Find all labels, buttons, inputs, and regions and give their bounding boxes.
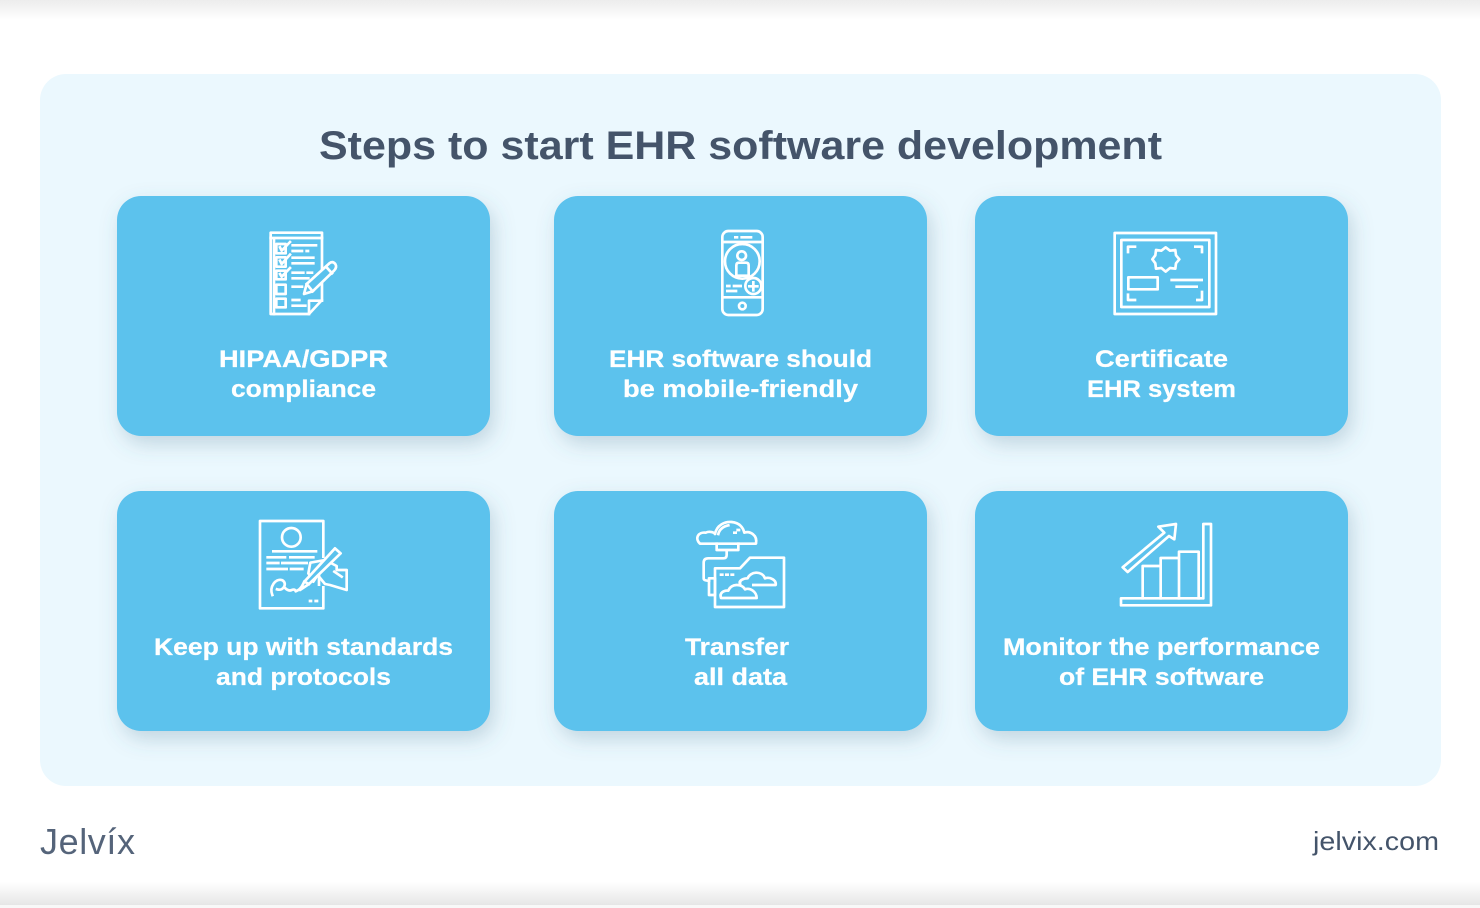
card: certificate: [975, 196, 1348, 436]
label: [154, 634, 453, 691]
website: jelvix.com: [1312, 826, 1439, 856]
label: Monitor the performance: [1003, 634, 1320, 661]
card: standards and protocols: [117, 491, 490, 731]
card: monitor performance: [975, 491, 1348, 731]
label: HIPAA/GDPR: [219, 346, 388, 373]
icon: signed document: [260, 521, 347, 608]
icon: certificate: [1115, 233, 1216, 314]
icon: growth chart: [1121, 524, 1211, 605]
label: [1003, 634, 1320, 691]
label: and protocols: [216, 664, 391, 691]
label: [685, 634, 789, 691]
label: Certificate: [1095, 346, 1228, 373]
label: Keep up with standards: [154, 634, 453, 661]
title: Steps to start EHR software development: [319, 124, 1162, 168]
label: EHR system: [1087, 376, 1236, 403]
icon: checklist with pencil: [271, 233, 336, 314]
icon: phone with user: [722, 231, 763, 315]
label: [219, 346, 388, 403]
label: compliance: [231, 376, 376, 403]
label: all data: [694, 664, 788, 691]
logo: Jelvíx: [40, 821, 135, 862]
label: of EHR software: [1059, 664, 1264, 691]
label: [1087, 346, 1236, 403]
label: be mobile-friendly: [623, 376, 859, 403]
card: transfer data: [554, 491, 927, 731]
panel: steps background: [40, 74, 1441, 786]
card: HIPAA/GDPR compliance: [117, 196, 490, 436]
label: EHR software should: [609, 346, 872, 373]
label: Transfer: [685, 634, 789, 661]
label: [609, 346, 872, 403]
card: mobile-friendly: [554, 196, 927, 436]
icon: cloud and folder: [697, 522, 784, 607]
